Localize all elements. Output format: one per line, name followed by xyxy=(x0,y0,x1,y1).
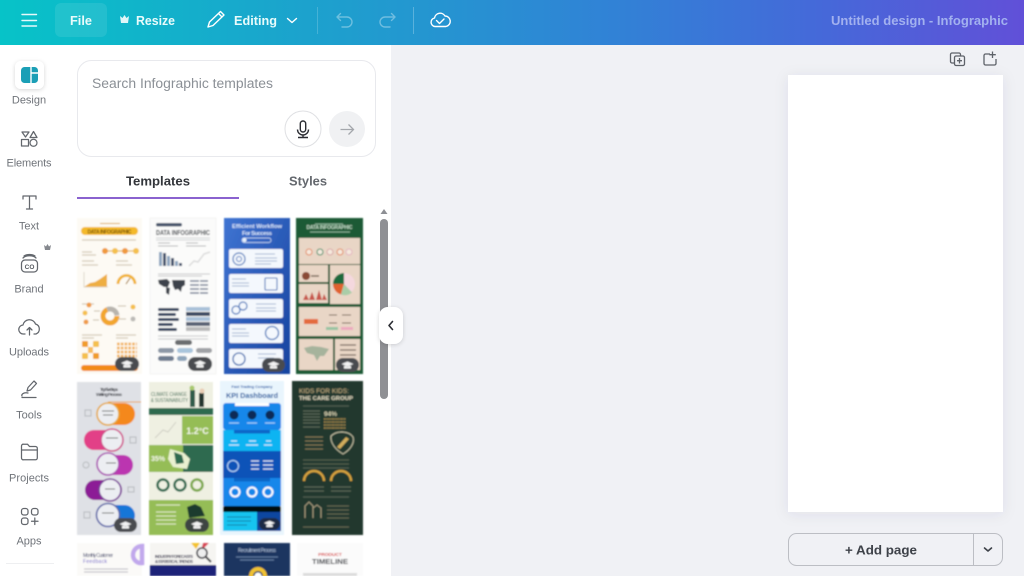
template: product timeline xyxy=(297,543,363,576)
nav: tools xyxy=(16,381,42,422)
template: climate change: 1.2°C xyxy=(186,426,209,436)
nav: uploads xyxy=(9,320,50,358)
icon: redo xyxy=(380,14,395,27)
template: climate change: & SUSTAINABILITY xyxy=(151,398,188,404)
resize button: Resize xyxy=(136,13,175,28)
file button xyxy=(55,3,107,37)
badge: premium xyxy=(188,357,212,371)
template: customer feedback: Feedback xyxy=(83,559,108,565)
template: kids for kids: KIDS FOR KIDS: xyxy=(299,389,349,395)
template: industry forecasts: INDUSTRY FORECASTS xyxy=(155,554,193,559)
page action icons xyxy=(950,52,996,66)
template: green data infographic: DATA INFOGRAPHIC xyxy=(306,225,353,231)
nav: elements xyxy=(6,132,52,170)
nav: uploads: Uploads xyxy=(9,346,50,358)
template: blue workflow: Efficient Workflow xyxy=(232,224,282,230)
template: kids for kids xyxy=(292,381,363,535)
icon: cloud saved xyxy=(431,13,450,26)
nav: text xyxy=(19,196,39,232)
template: grey data infographic: DATA INFOGRAPHIC xyxy=(156,230,210,237)
template: customer feedback xyxy=(77,543,142,576)
workspace background xyxy=(391,45,1024,576)
template: KPI dashboard xyxy=(220,381,284,535)
template: yellow data infographic: DATA INFOGRAPHIC xyxy=(88,230,132,236)
add page button: + Add page xyxy=(845,542,917,558)
template: writing process: Writing Process xyxy=(96,392,122,398)
nav: projects xyxy=(9,444,50,484)
nav: projects: Projects xyxy=(9,472,50,484)
template: product timeline: TIMELINE xyxy=(312,559,348,566)
icon: microphone xyxy=(285,111,321,147)
template: recruitment process xyxy=(224,543,290,576)
nav: design xyxy=(12,61,46,106)
template: writing process xyxy=(77,382,141,535)
nav: design: Design xyxy=(12,94,46,106)
icon: undo xyxy=(337,14,352,27)
document title: Untitled design - Infographic xyxy=(831,13,1008,28)
scrollbar xyxy=(380,209,388,399)
left panel background xyxy=(0,45,391,576)
icon: menu xyxy=(22,14,36,26)
top toolbar xyxy=(0,0,1024,45)
icon: submit arrow xyxy=(329,111,365,147)
tabs: Templates xyxy=(126,174,190,188)
template: blue workflow xyxy=(224,218,290,374)
template: climate change: 35% xyxy=(151,456,166,463)
resize button xyxy=(120,13,175,28)
file button: File xyxy=(70,13,92,28)
template: climate change: CLIMATE CHANGE xyxy=(151,392,187,398)
search box: Search Infographic templates xyxy=(92,76,273,91)
tabs: Styles xyxy=(289,174,327,188)
template: customer feedback: Monthly Customer xyxy=(83,553,113,559)
template: yellow data infographic xyxy=(77,218,142,374)
template: blue workflow: For Success xyxy=(242,231,272,237)
template: recruitment process: Recruitment Process xyxy=(238,548,276,554)
add page button xyxy=(788,534,1002,566)
design canvas xyxy=(788,75,1003,512)
editing menu xyxy=(208,12,296,28)
icon: duplicate page xyxy=(950,53,964,66)
badge: premium xyxy=(114,518,137,532)
badge: premium xyxy=(185,518,209,532)
nav: apps xyxy=(16,508,42,548)
template: green data infographic xyxy=(296,218,363,374)
template: kids for kids: THE CARE GROUP xyxy=(299,396,353,402)
nav: brand: CO xyxy=(25,264,34,271)
editing menu: Editing xyxy=(234,13,277,28)
tabs xyxy=(77,174,327,199)
sidebar navigation xyxy=(6,61,54,564)
nav: tools: Tools xyxy=(16,410,42,422)
template: climate change xyxy=(149,382,213,535)
template: writing process: Top Five Steps xyxy=(100,387,118,393)
template: industry forecasts: & STATISTICAL TRENDS xyxy=(155,559,193,564)
panel collapse handle xyxy=(379,307,403,344)
search box xyxy=(78,60,376,156)
badge: premium xyxy=(262,358,285,372)
nav: brand: Brand xyxy=(14,284,44,296)
nav: elements: Elements xyxy=(6,158,52,170)
badge: premium xyxy=(259,518,280,530)
template: KPI dashboard: KPI Dashboard xyxy=(226,391,278,400)
nav: brand xyxy=(14,244,51,296)
template grid xyxy=(77,218,363,576)
badge: premium xyxy=(115,357,139,371)
template: kids for kids: 94% xyxy=(324,411,337,418)
template: KPI dashboard: Fast Trading Company xyxy=(232,385,273,389)
template: product timeline: PRODUCT xyxy=(318,552,342,558)
template: industry forecasts xyxy=(150,543,216,576)
nav: text: Text xyxy=(19,220,39,232)
template: grey data infographic xyxy=(150,218,216,374)
badge: premium xyxy=(336,358,359,372)
icon: add page xyxy=(984,52,996,65)
nav: apps: Apps xyxy=(16,536,42,548)
